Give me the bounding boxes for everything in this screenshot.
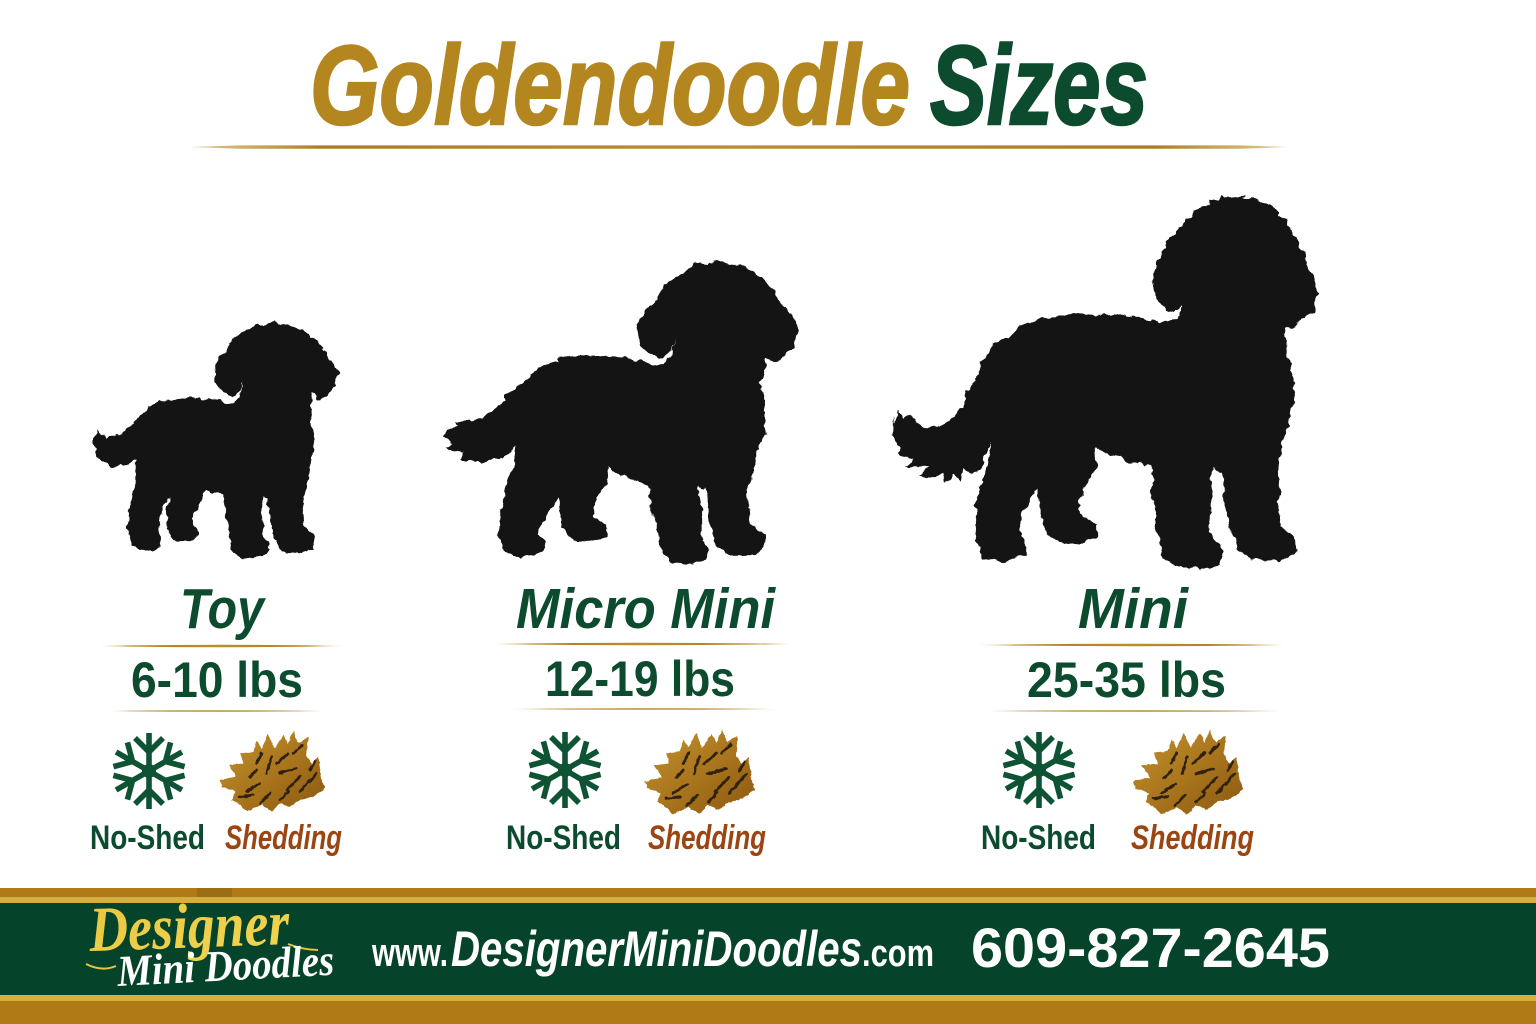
label: no-shed: No-Shed	[506, 819, 621, 857]
icon: no-shed snowflake	[525, 732, 605, 808]
label: mini: Mini	[1078, 577, 1189, 641]
label: micro mini: Micro Mini	[516, 577, 776, 641]
icon: shedding fur	[645, 729, 755, 814]
silhouette: toy dog	[94, 321, 338, 559]
label: no-shed: No-Shed	[981, 819, 1096, 857]
logo: Mini Doodles	[115, 936, 335, 996]
website: DesignerMiniDoodles	[451, 921, 862, 977]
label: shedding: Shedding	[1131, 819, 1254, 857]
silhouette: mini dog	[893, 194, 1319, 569]
footer band	[0, 887, 1536, 1024]
icon: shedding fur	[1133, 729, 1243, 814]
label: shedding: Shedding	[225, 819, 342, 857]
panel: micro mini	[444, 259, 798, 857]
website: .com	[862, 933, 934, 975]
icon: shedding fur	[220, 731, 325, 812]
icon: no-shed snowflake	[999, 732, 1079, 808]
website: www.	[371, 931, 448, 975]
title underline	[190, 145, 1287, 149]
label: no-shed: No-Shed	[90, 819, 205, 857]
title: Goldendoodle	[310, 23, 910, 148]
title: Sizes	[930, 23, 1148, 148]
label: toy: Toy	[180, 577, 267, 641]
panel: mini	[893, 194, 1319, 857]
logo: Designer	[87, 887, 291, 965]
weight: mini: 25-35 lbs	[1027, 652, 1226, 708]
label: shedding: Shedding	[648, 819, 766, 857]
logo	[86, 887, 335, 996]
phone number: 609-827-2645	[971, 916, 1330, 979]
silhouette: micro mini dog	[444, 259, 798, 565]
weight: toy: 6-10 lbs	[131, 652, 303, 708]
weight: micro mini: 12-19 lbs	[545, 651, 735, 707]
icon: no-shed snowflake	[109, 733, 189, 809]
panel: toy	[90, 321, 342, 857]
